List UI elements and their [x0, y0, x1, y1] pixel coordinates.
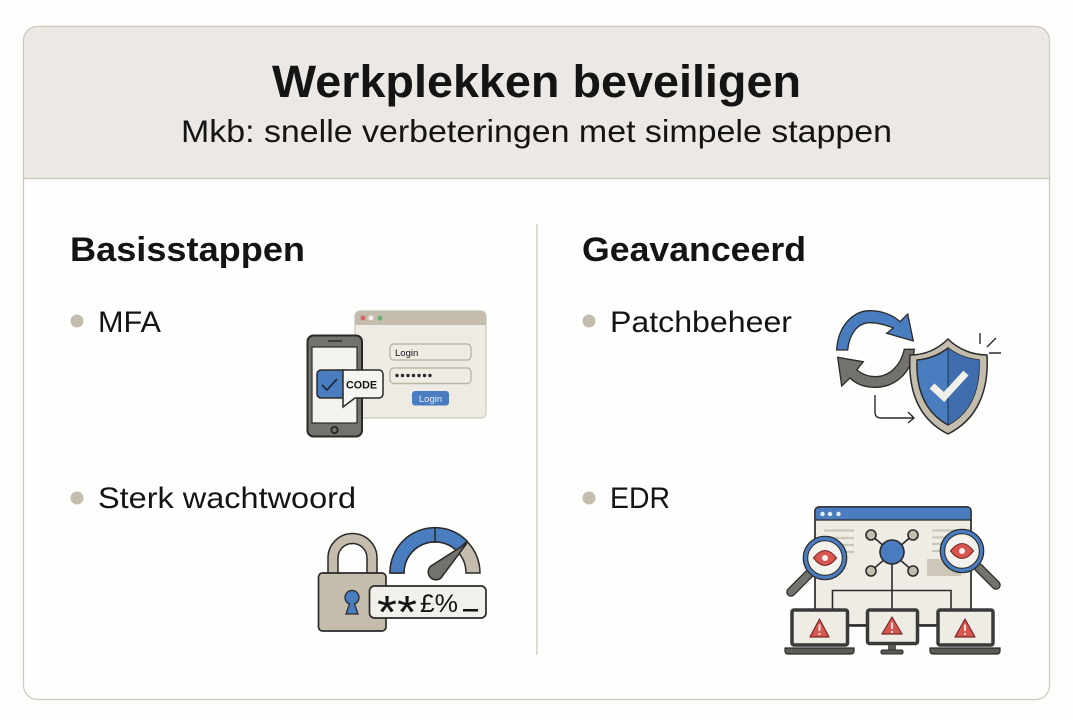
heading: Geavanceerd: Geavanceerd — [582, 231, 806, 269]
title: Werkplekken beveiligen — [272, 56, 801, 107]
list item: EDR: EDR — [610, 482, 670, 515]
network graph — [832, 530, 951, 626]
login window: Login — [395, 348, 418, 359]
process arrow — [875, 395, 914, 423]
shield — [910, 339, 987, 434]
gauge — [390, 528, 480, 580]
list item: EDR — [582, 482, 670, 515]
list item: MFA: MFA — [98, 306, 161, 339]
padlock — [318, 533, 386, 631]
icon: patch management — [837, 311, 1001, 434]
column divider — [536, 224, 538, 655]
phone — [308, 336, 362, 436]
console window — [815, 507, 971, 625]
list item: Patchbeheer: Patchbeheer — [610, 306, 792, 339]
icon: strong password lock and gauge — [318, 528, 486, 638]
subtitle: Mkb: snelle verbeteringen met simpele stappen — [181, 113, 892, 149]
password field: ** — [377, 586, 417, 638]
code bubble: CODE — [346, 380, 377, 392]
code bubble — [317, 370, 383, 407]
right laptop alert — [930, 610, 1000, 654]
magnifier left — [791, 536, 847, 592]
magnifier right — [940, 529, 996, 585]
left laptop alert — [785, 610, 854, 654]
list item: MFA — [70, 306, 161, 339]
login window: Login — [419, 394, 442, 405]
refresh arrows — [837, 311, 914, 387]
password field — [370, 586, 486, 638]
icon: EDR monitoring network — [785, 507, 1000, 654]
password field: £% — [420, 590, 458, 618]
heading: Basisstappen: Basisstappen — [70, 231, 305, 269]
sparks — [980, 333, 1001, 353]
monitor alert — [868, 610, 918, 654]
login window — [355, 311, 486, 418]
icon: MFA login with phone code — [308, 311, 486, 436]
list item: Sterk wachtwoord: Sterk wachtwoord — [98, 482, 356, 515]
